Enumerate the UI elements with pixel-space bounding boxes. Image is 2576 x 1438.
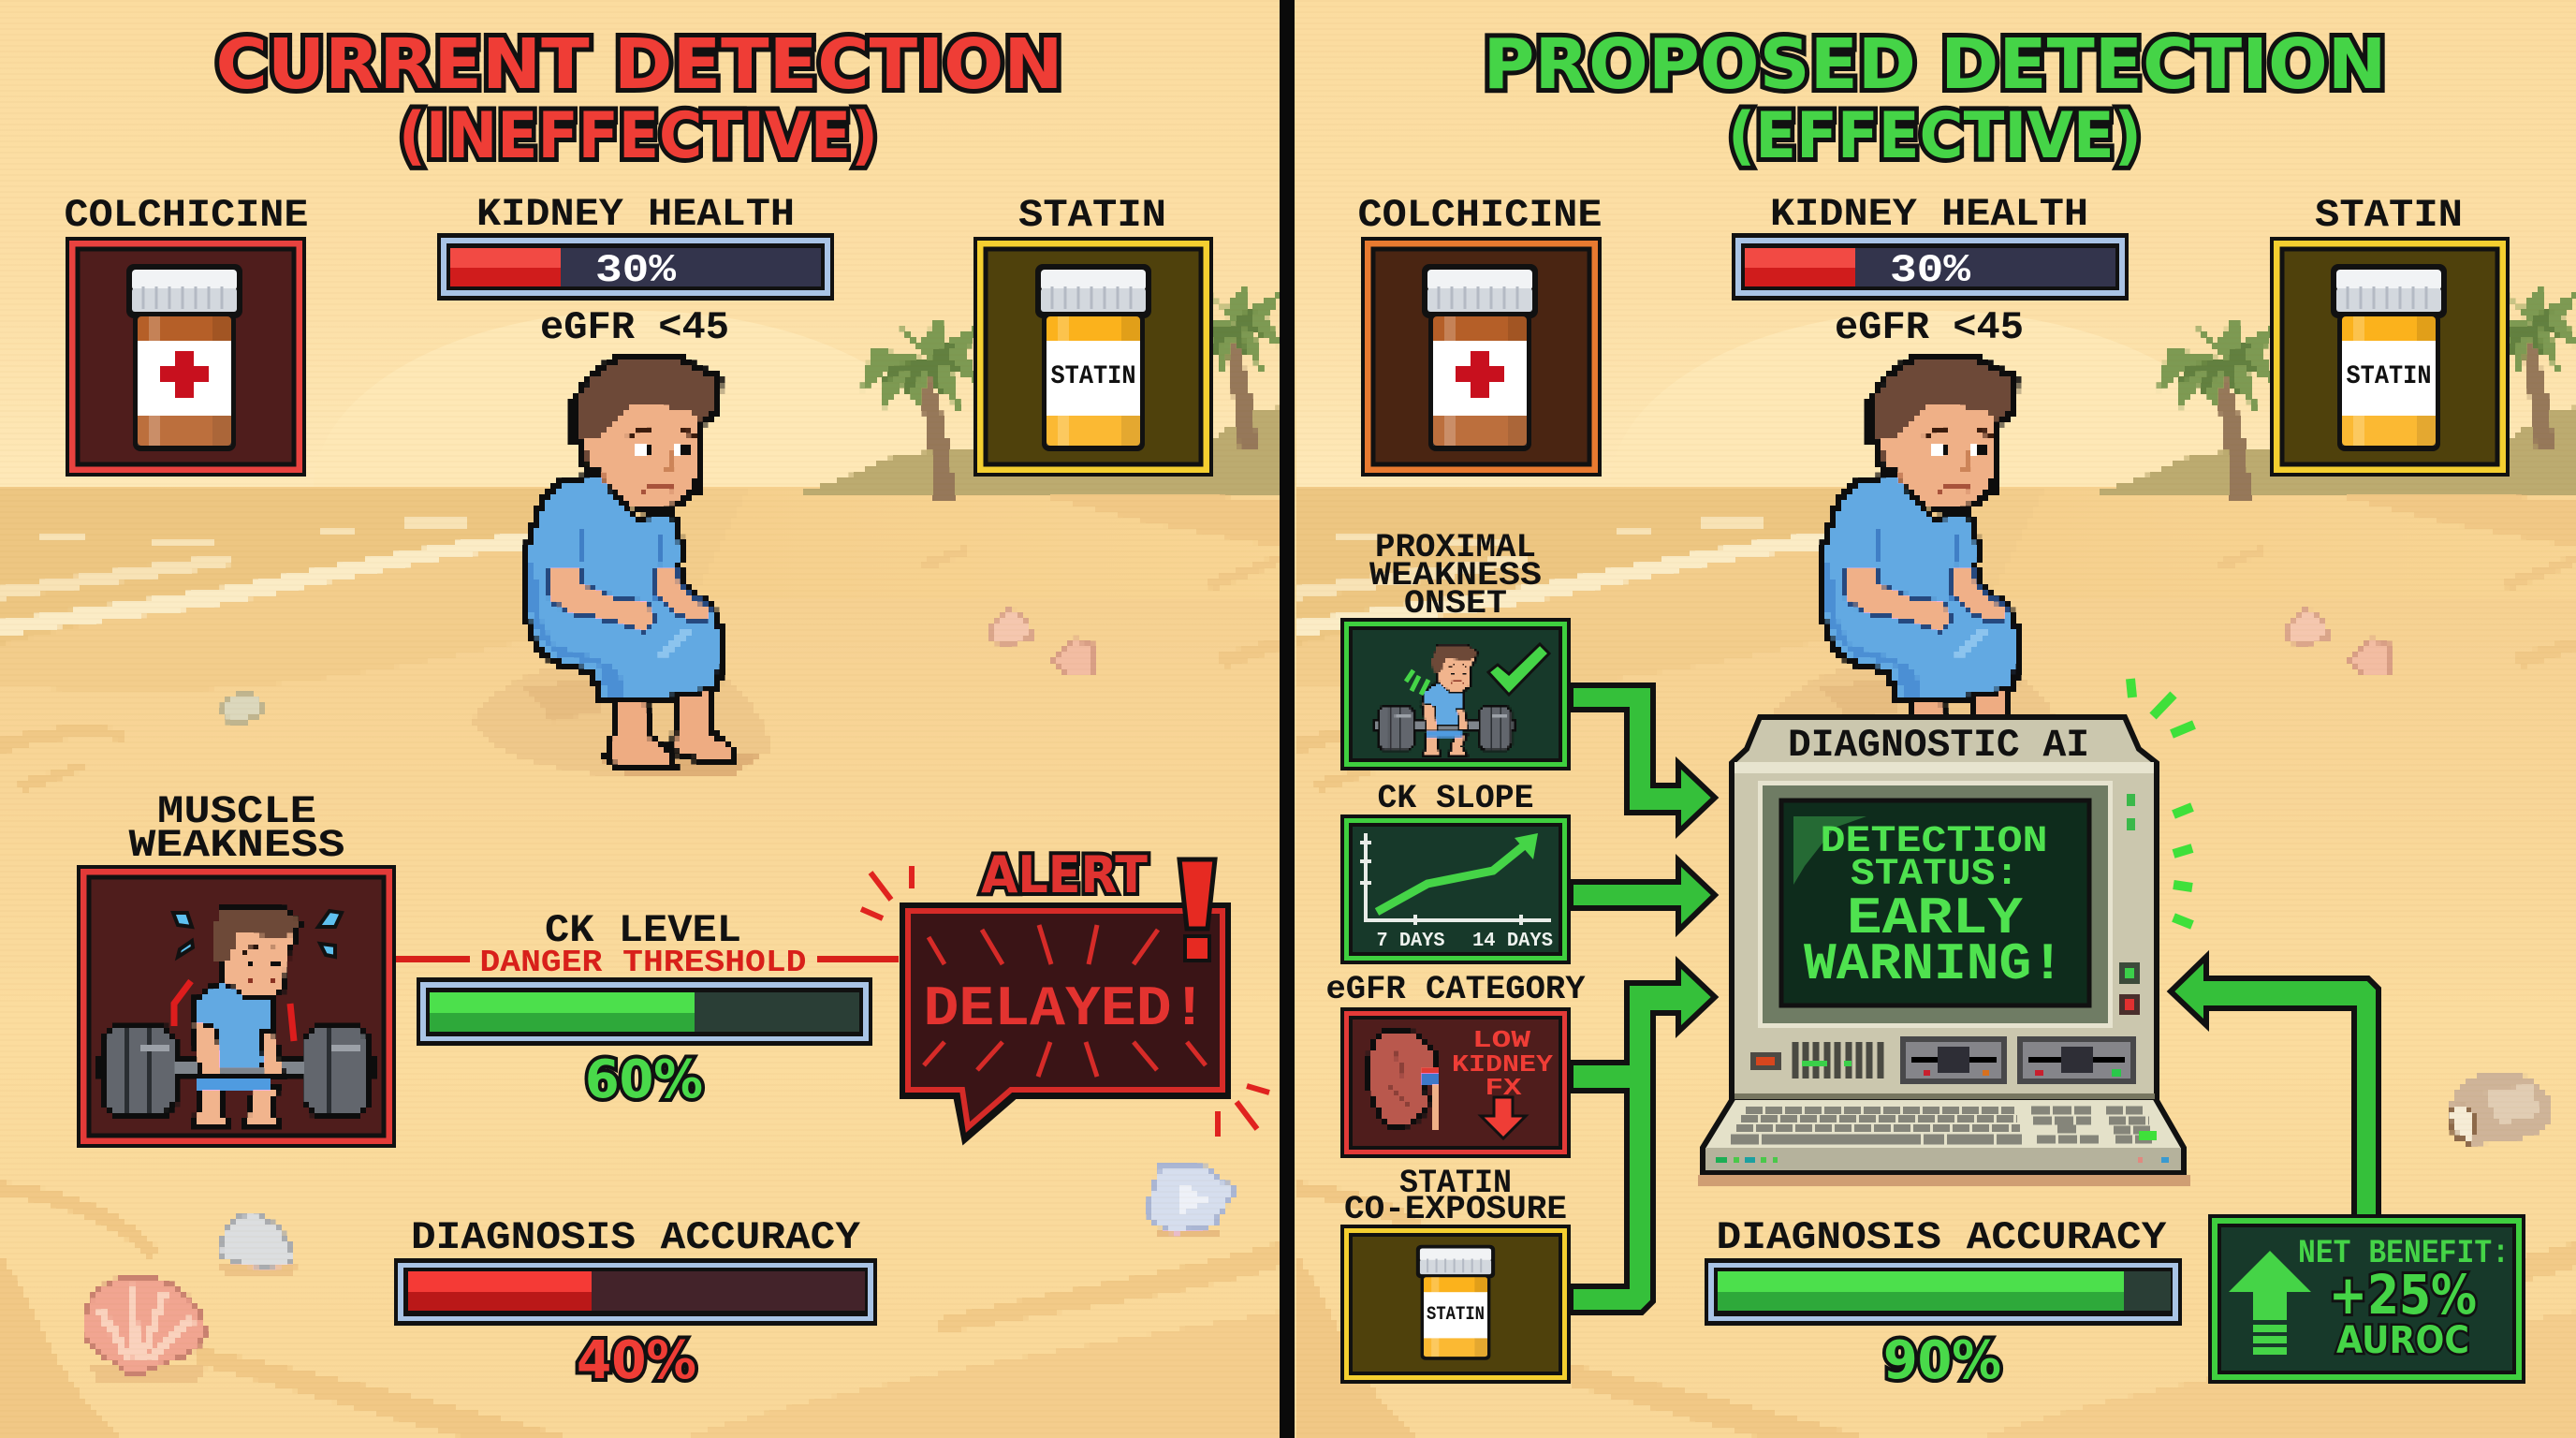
bar: kidney health: [1732, 233, 2129, 301]
card: ck slope: 7 DAYS: [1376, 931, 1445, 952]
arrow: egfr and statin to AI: [1571, 962, 1715, 1313]
speech bubble: [903, 906, 1227, 1138]
card: statin: STATIN: [2346, 362, 2432, 391]
signal ticks: [2130, 679, 2194, 925]
icon: statin bottle: [2331, 264, 2447, 451]
proximal weakness label: WEAKNESS: [1369, 557, 1542, 594]
screen text: DETECTION: [1820, 821, 2048, 863]
ck level label: CK LEVEL: [545, 908, 741, 953]
ck slope label: CK SLOPE: [1378, 780, 1533, 817]
statin co-exposure label: CO-EXPOSURE: [1344, 1191, 1567, 1228]
icon: up arrow: [2229, 1251, 2311, 1320]
right-side coconut: [2449, 1071, 2552, 1144]
card: statin co-exposure: [1340, 1225, 1571, 1384]
sparks: [861, 866, 1269, 1137]
proximal weakness label: [1369, 529, 1542, 623]
icon: statin bottle: [1035, 264, 1151, 451]
icon: statin bottle: [1416, 1245, 1495, 1360]
card: proximal weakness: [1340, 618, 1571, 770]
housing: [1732, 717, 2157, 1100]
vent: [1795, 1042, 1881, 1078]
floppy drives: [1900, 1036, 2007, 1084]
value: 40%: 40%: [577, 1330, 696, 1391]
panel: proposed detection: [1325, 24, 2525, 1391]
card: ck slope: [1340, 814, 1571, 964]
icon: colchicine bottle: [1422, 264, 1538, 451]
card: egfr category: LOW: [1472, 1026, 1531, 1054]
screen text: STATUS:: [1851, 854, 2019, 896]
card: egfr category: FX: [1485, 1074, 1522, 1102]
card: net benefit: AUROC: [2336, 1319, 2469, 1362]
kidney health label: KIDNEY HEALTH: [476, 192, 795, 237]
card: colchicine: [66, 237, 306, 477]
background: right beach: [1296, 286, 2576, 1438]
left-side shells: [84, 1165, 1234, 1380]
statin label: STATIN: [1018, 193, 1166, 238]
label: DIAGNOSTIC AI: [1788, 723, 2089, 768]
card: statin: STATIN: [1050, 362, 1136, 391]
statin co-exposure label: [1344, 1165, 1567, 1228]
bar: kidney health: 30%: [595, 248, 677, 293]
icon: kidney: [1368, 1031, 1441, 1128]
icon: lifter: [1375, 646, 1515, 756]
base leds: [1716, 1157, 1727, 1163]
title: proposed detection: (EFFECTIVE): [1728, 99, 2142, 173]
icon: sweat: [173, 911, 342, 957]
icon: lifter: [98, 908, 374, 1124]
proximal weakness label: ONSET: [1404, 585, 1507, 623]
screen text: WARNING!: [1804, 934, 2064, 994]
card: net benefit: [2208, 1214, 2525, 1384]
card: statin: [2270, 237, 2510, 477]
power switch: [1750, 1052, 1781, 1070]
arrow: proximal weakness to AI: [1571, 685, 1715, 832]
proximal weakness label: PROXIMAL: [1375, 529, 1536, 566]
statin label: STATIN: [2315, 193, 2463, 238]
card: net benefit: NET BENEFIT:: [2298, 1235, 2510, 1272]
diagnosis accuracy label: DIAGNOSIS ACCURACY: [1717, 1215, 2167, 1260]
value: 90%: 90%: [1883, 1330, 2001, 1391]
diagnosis accuracy label: DIAGNOSIS ACCURACY: [411, 1215, 861, 1260]
card: egfr category: KIDNEY: [1452, 1050, 1553, 1078]
card: net benefit: +25%: [2329, 1263, 2477, 1327]
arrow: net benefit to AI: [2171, 957, 2378, 1217]
danger threshold marker: DANGER THRESHOLD: [479, 946, 807, 980]
keyboard: [1703, 1097, 2184, 1172]
card: colchicine: [1361, 237, 1602, 477]
card: statin: [973, 237, 1213, 477]
title: current detection: [215, 24, 1063, 173]
colchicine label: COLCHICINE: [64, 193, 309, 238]
icon: check mark: [1488, 644, 1549, 695]
card: egfr category: [1340, 1007, 1571, 1158]
icon: colchicine bottle: [126, 264, 242, 451]
title: proposed detection: PROPOSED DETECTION: [1483, 24, 2387, 105]
muscle weakness label: MUSCLE: [157, 789, 316, 834]
screen glare: [1793, 816, 1866, 885]
panel: current detection: [64, 24, 1269, 1391]
bar: kidney health: [437, 233, 834, 301]
muscle weakness label: WEAKNESS: [129, 823, 344, 868]
danger threshold marker: [396, 946, 899, 980]
chart: axes: [1360, 833, 1551, 925]
alert callout: ALERT: [981, 845, 1148, 904]
statin co-exposure label: STATIN: [1399, 1165, 1512, 1202]
bar: ck level: [417, 977, 872, 1046]
bar: kidney health: 30%: [1890, 248, 1971, 293]
icon: down arrow: [1481, 1097, 1526, 1138]
title: current detection: (INEFFECTIVE): [399, 99, 878, 173]
screen text: EARLY: [1847, 888, 2023, 948]
muscle weakness label: [129, 789, 344, 868]
bar: diagnosis accuracy: [394, 1258, 877, 1326]
card: statin co-exposure: STATIN: [1427, 1304, 1485, 1326]
title: current detection: CURRENT DETECTION: [215, 24, 1063, 105]
arrows: inputs to AI: [1571, 685, 2378, 1313]
kidney health label: KIDNEY HEALTH: [1770, 192, 2088, 237]
leds: [2127, 794, 2135, 806]
rays: [924, 925, 1206, 1077]
icon: exclamation: [1179, 859, 1215, 929]
arrow: ck slope to AI: [1571, 860, 1715, 931]
computer: diagnostic AI: [1698, 679, 2194, 1186]
bar: diagnosis accuracy: [1705, 1258, 2182, 1326]
background: left beach: [0, 286, 1280, 1438]
figure: patient: [527, 356, 733, 765]
card: ck slope: 14 DAYS: [1472, 931, 1553, 952]
chart: rising line: [1377, 843, 1528, 912]
colchicine label: COLCHICINE: [1357, 193, 1603, 238]
divider: [1280, 0, 1295, 1438]
egfr category label: eGFR CATEGORY: [1325, 971, 1586, 1008]
alert callout: [861, 845, 1269, 1138]
value: 60%: 60%: [585, 1049, 703, 1110]
title: proposed detection: [1483, 24, 2387, 173]
egfr label: eGFR <45: [540, 305, 729, 350]
monitor bezel: [1758, 781, 2113, 1028]
screen text: [1804, 821, 2064, 994]
figure: patient: [1823, 356, 2029, 765]
alert callout: DELAYED!: [923, 978, 1208, 1042]
card: muscle weakness: [77, 865, 396, 1148]
desk shadow: [1698, 1175, 2190, 1186]
egfr label: eGFR <45: [1835, 305, 2024, 350]
